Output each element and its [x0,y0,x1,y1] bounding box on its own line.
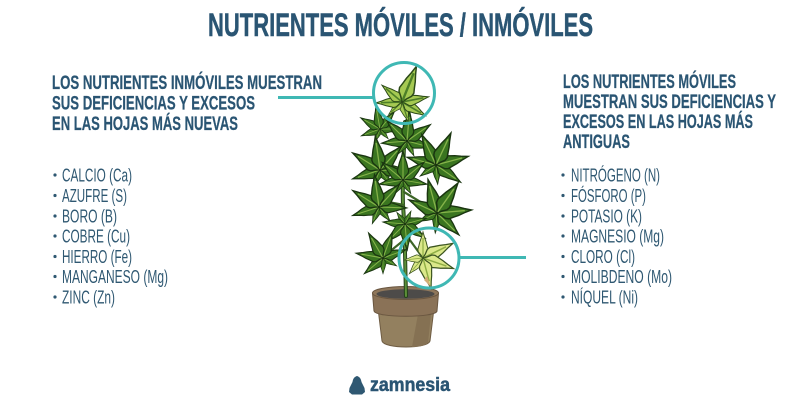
list: mobile nutrients: NITRÓGENO (N) [571,164,660,186]
list: immobile nutrients: CALCIO (Ca) [62,164,132,186]
list: mobile nutrients: MAGNESIO (Mg) [571,226,664,246]
title: NUTRIENTES MÓVILES / INMÓVILES [208,7,593,43]
list: mobile nutrients: MOLIBDENO (Mo) [571,266,672,287]
list: mobile nutrients: FÓSFORO (P) [571,185,646,206]
pot [372,286,438,347]
heading: immobile nutrients: EN LAS HOJAS MÁS NUEVAS [52,113,238,135]
list: immobile nutrients: MANGANESO (Mg) [62,266,168,287]
list: immobile nutrients: COBRE (Cu) [62,226,130,246]
list: immobile nutrients: BORO (B) [62,206,117,226]
list: immobile nutrients: HIERRO (Fe) [62,246,132,267]
logo: zamnesia [349,375,450,396]
list: immobile nutrients: AZUFRE (S) [62,185,127,206]
callout: new leaves circle and connector [278,62,434,124]
heading: immobile nutrients: SUS DEFICIENCIAS Y EXCESOS [52,94,255,114]
icon: logo mark [349,376,365,394]
old leaf with deficiency [404,232,456,290]
list: mobile nutrients: CLORO (Cl) [571,246,635,267]
new leaf with deficiency [376,63,430,123]
list: mobile nutrients: NÍQUEL (Ni) [571,286,638,308]
stems [378,122,437,296]
green leaves [346,102,484,284]
logo wordmark: zamnesia [370,375,450,396]
heading: immobile nutrients: LOS NUTRIENTES INMÓVILES MUESTRAN [52,72,322,94]
list: mobile nutrients: POTASIO (K) [571,206,642,226]
list: immobile nutrients [53,164,168,308]
heading: immobile nutrients [52,72,322,135]
heading: mobile nutrients: ANTIGUAS [563,132,630,153]
heading: mobile nutrients [563,71,776,153]
callout: old leaves circle and connector [399,228,526,288]
list: mobile nutrients [561,164,672,308]
list: immobile nutrients: ZINC (Zn) [62,286,115,308]
plant in pot [346,63,484,347]
